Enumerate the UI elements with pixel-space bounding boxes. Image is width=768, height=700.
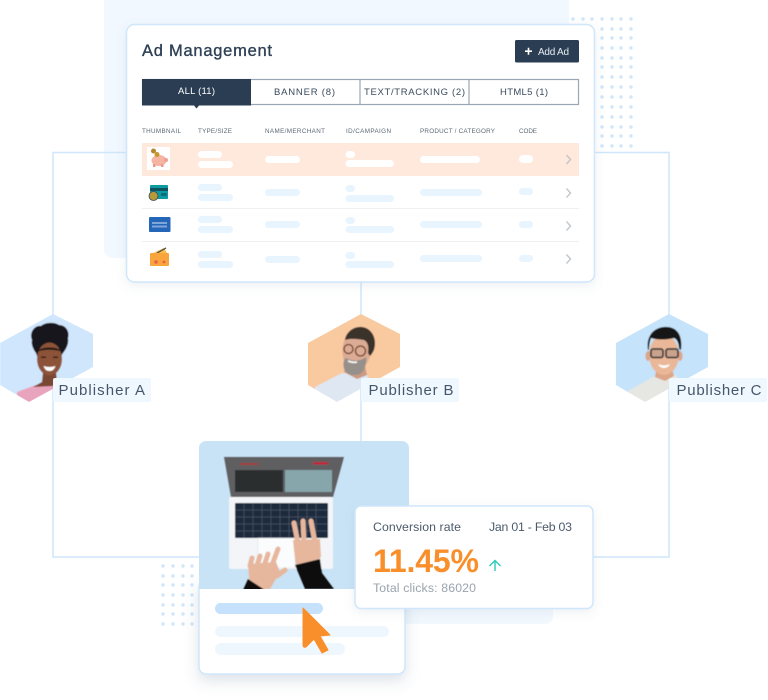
label: Publisher C: Publisher C [676,382,762,399]
label: Publisher B: Publisher B [368,382,454,399]
connector lines between ad card, publishers and landing page [53,152,669,557]
publisher C [613,310,767,405]
button: add ad: Add Ad [538,47,569,58]
tabs: ALL (11) [178,86,215,97]
right hand [294,521,315,543]
panel: conversion rate [355,506,593,608]
placeholder: text line short [215,643,345,655]
label: total clicks: Total clicks: 86020 [373,581,476,595]
tabs: BANNER (8) [274,87,335,98]
value: 11.45%: 11.45% [373,543,479,579]
background panel [104,0,569,258]
icon: credit card with coin [149,185,168,200]
button: add ad [515,40,579,62]
icon: blue card [149,217,170,232]
portrait: publisher C [616,314,708,402]
label: conversion rate: Conversion rate [373,520,461,534]
tabs: HTML5 (1) [500,87,548,98]
left sleeve [243,579,265,590]
table row 3 [149,216,570,233]
placeholder: highlighted line [215,603,323,614]
table column headers: THUMBNAIL [142,128,181,135]
right sleeve [295,559,334,589]
label: Publisher A [53,378,151,402]
illustration: laptop photo with hands [199,441,409,590]
portrait: publisher B [308,314,400,402]
icon: orange card [150,248,169,266]
portrait: publisher A [0,310,95,405]
label: Publisher B [361,378,459,402]
placeholder: text line [215,626,389,637]
dot pattern: top right [571,17,633,148]
table column headers: TYPE/SIZE [198,128,232,135]
panel: landing page [199,441,409,674]
tabs [142,79,578,108]
publisher A [0,310,151,405]
left hand [250,549,285,576]
dot pattern: bottom left [161,564,194,626]
table row 2 [149,184,570,202]
table column headers [142,128,537,135]
table column headers: ID/CAMPAIGN [346,128,391,135]
panel: stat card backing [400,590,553,624]
icon: cursor arrow [303,608,330,653]
table row 4 [150,248,570,268]
table column headers: NAME/MERCHANT [265,128,325,135]
label: date range: Jan 01 - Feb 03 [489,520,572,534]
table column headers: CODE [519,128,537,135]
publisher B [305,310,459,405]
label: Publisher C [669,378,767,402]
table row 1: highlighted [142,143,579,176]
label: Publisher A: Publisher A [58,382,145,399]
panel: ad management [126,24,594,282]
heading: Ad Management: Ad Management [142,42,272,60]
icon: piggy bank [151,148,168,167]
icon: up arrow [490,560,500,571]
tabs: TEXT/TRACKING (2) [364,87,465,98]
table column headers: PRODUCT / CATEGORY [420,128,496,135]
